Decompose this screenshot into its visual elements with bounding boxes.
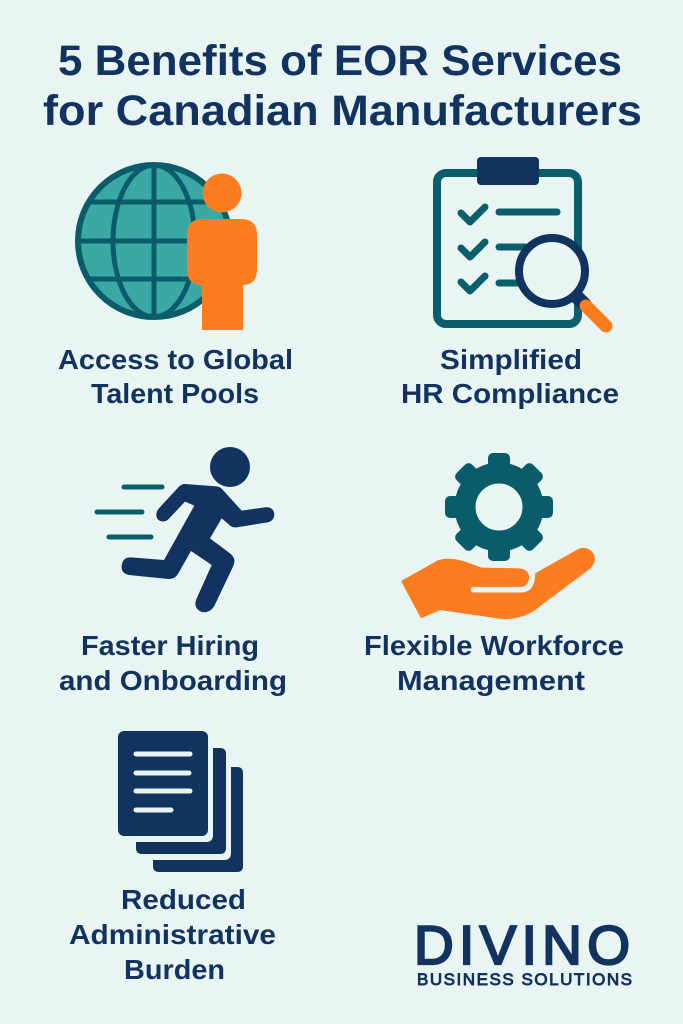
title: 5 Benefits of EOR Services — [58, 37, 622, 85]
label: access to global talent pools: Access to Global — [58, 344, 293, 375]
label: access to global talent pools — [58, 344, 293, 409]
panel: faster hiring and onboarding — [59, 447, 287, 696]
panel: flexible workforce management — [364, 453, 624, 696]
panel: access to global talent pools — [58, 165, 293, 409]
label: simplified hr compliance: HR Compliance — [401, 378, 619, 409]
logo: divino business solutions: DIVINO — [414, 914, 630, 976]
icon: globe with person — [78, 165, 257, 330]
label: reduced administrative burden: Administrative — [69, 919, 276, 950]
icon: stacked documents — [118, 731, 243, 872]
icon: running person — [97, 447, 274, 612]
panel: reduced administrative burden — [69, 731, 276, 985]
title — [43, 37, 642, 135]
title: for Canadian Manufacturers — [43, 87, 642, 135]
logo: divino business solutions: BUSINESS SOLUTIONS — [417, 970, 632, 989]
label: reduced administrative burden: Reduced — [121, 884, 246, 915]
icon: gear on hand — [401, 453, 595, 619]
label: simplified hr compliance — [401, 344, 619, 409]
label: reduced administrative burden: Burden — [124, 954, 225, 985]
label: faster hiring and onboarding: and Onboarding — [59, 665, 287, 696]
panel: simplified hr compliance — [401, 157, 619, 409]
label: access to global talent pools: Talent Pools — [91, 378, 259, 409]
label: flexible workforce management — [364, 630, 624, 696]
label: flexible workforce management: Flexible Workforce — [364, 630, 624, 661]
label: faster hiring and onboarding: Faster Hiring — [81, 630, 259, 661]
label: faster hiring and onboarding — [59, 630, 287, 696]
label: simplified hr compliance: Simplified — [440, 344, 582, 375]
label: reduced administrative burden — [69, 884, 276, 985]
icon: clipboard with magnifier — [437, 157, 606, 326]
label: flexible workforce management: Management — [397, 665, 585, 696]
